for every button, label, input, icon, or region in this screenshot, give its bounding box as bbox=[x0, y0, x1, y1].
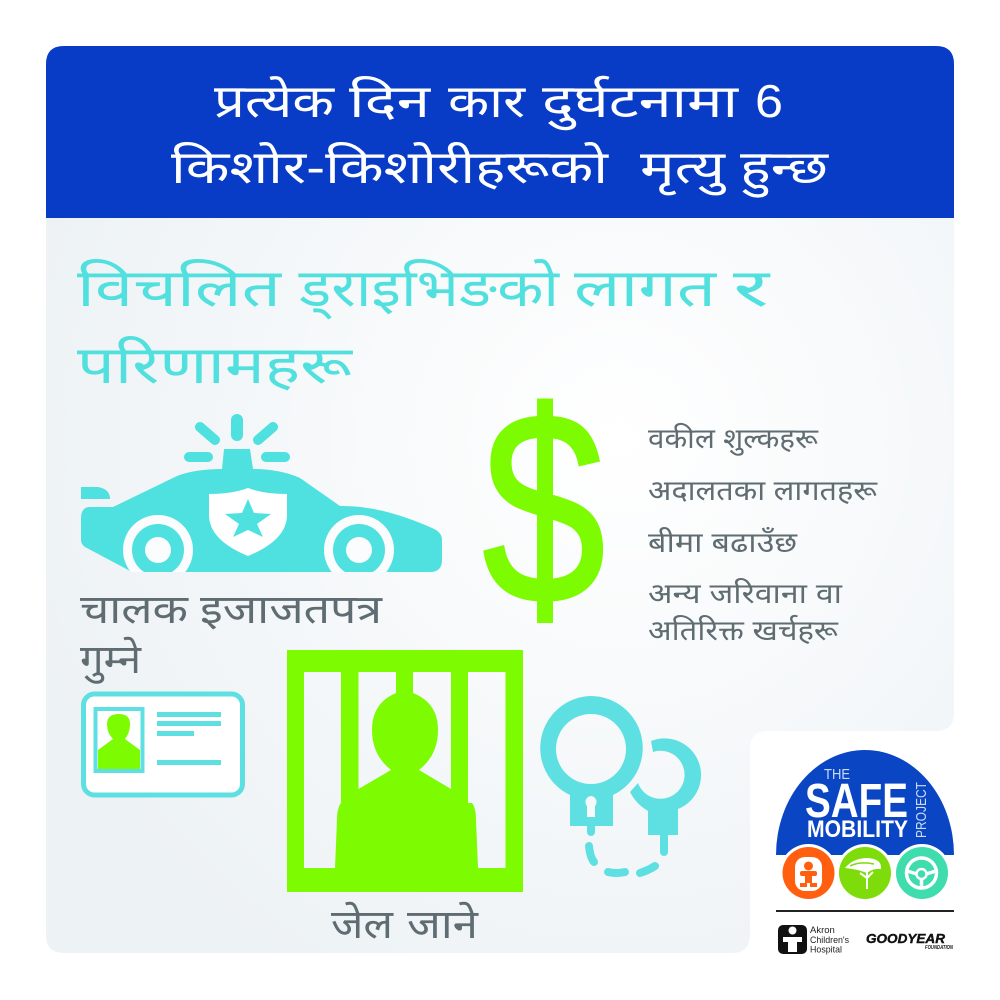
logo wordmark: PROJECT bbox=[913, 782, 930, 838]
header title line 1: प्रत्येक bbox=[214, 74, 336, 127]
label: licence suspended bbox=[80, 588, 383, 683]
logo: Akron Children's Hospital bbox=[778, 925, 849, 956]
subtitle heading: ड्राइभिङको bbox=[298, 260, 561, 320]
label: licence suspended: चालक bbox=[80, 588, 189, 632]
subtitle heading: परिणामहरू bbox=[77, 337, 354, 395]
logo wordmark: SAFE bbox=[805, 775, 908, 828]
label: licence suspended: गुम्ने bbox=[80, 637, 142, 683]
icon: police car bbox=[81, 414, 442, 585]
header title line 1: दुर्घटनामा bbox=[542, 75, 739, 131]
cost list: अन्य जरिवाना वा bbox=[648, 577, 843, 609]
label: licence suspended: इजाजतपत्र bbox=[200, 588, 383, 632]
logo: Safe Mobility Project bbox=[776, 750, 954, 956]
logo wordmark bbox=[805, 766, 930, 843]
icon: dollar sign: $ bbox=[482, 355, 605, 661]
logo dome bbox=[776, 750, 954, 855]
cost list: अतिरिक्त खर्चहरू bbox=[648, 614, 839, 646]
label: going to jail: जेल bbox=[331, 902, 394, 947]
header title line 1: दिन bbox=[349, 75, 432, 127]
logo wordmark: THE bbox=[824, 766, 850, 783]
panel: blue header bbox=[46, 46, 954, 218]
logo: Akron Children's Hospital: Akron bbox=[810, 925, 835, 936]
cost list: वकील शुल्कहरू bbox=[648, 422, 819, 456]
icon: handcuffs bbox=[540, 696, 701, 873]
header title line 2: मृत्यु bbox=[640, 141, 727, 197]
icon: steering wheel bbox=[893, 844, 951, 902]
header title line 2: किशोर-किशोरीहरूको bbox=[171, 141, 609, 193]
label: going to jail: जाने bbox=[407, 902, 479, 947]
header title line 2: हुन्छ bbox=[740, 141, 829, 198]
cost list bbox=[648, 422, 878, 646]
logo: Akron Children's Hospital: Hospital bbox=[810, 944, 842, 956]
divider bbox=[776, 910, 954, 912]
logo: Goodyear Foundation: FOUNDATION bbox=[925, 945, 953, 951]
subtitle heading: विचलित bbox=[77, 260, 283, 318]
subtitle heading bbox=[77, 260, 772, 395]
header title line 1 bbox=[214, 74, 783, 131]
icon: bike helmet bbox=[836, 844, 894, 902]
label: going to jail bbox=[331, 902, 479, 947]
header title line 1: कार bbox=[448, 75, 526, 127]
header title line 1: 6 bbox=[755, 75, 783, 127]
logo: Akron Children's Hospital: Children's bbox=[810, 935, 849, 946]
icon: car seat bbox=[780, 844, 838, 902]
icon: licence card bbox=[84, 694, 242, 795]
subtitle heading: र bbox=[733, 260, 772, 318]
header title line 2 bbox=[171, 141, 829, 198]
panel: main card bbox=[46, 218, 954, 953]
logo: Goodyear Foundation: GOODYEAR bbox=[866, 932, 945, 946]
cost list: अदालतका लागतहरू bbox=[648, 475, 878, 506]
icon: person behind bars bbox=[287, 650, 523, 892]
logo: Goodyear Foundation bbox=[866, 932, 953, 951]
logo wordmark: MOBILITY bbox=[807, 816, 908, 843]
subtitle heading: लागत bbox=[574, 260, 718, 318]
cost list: बीमा बढाउँछ bbox=[648, 526, 799, 558]
